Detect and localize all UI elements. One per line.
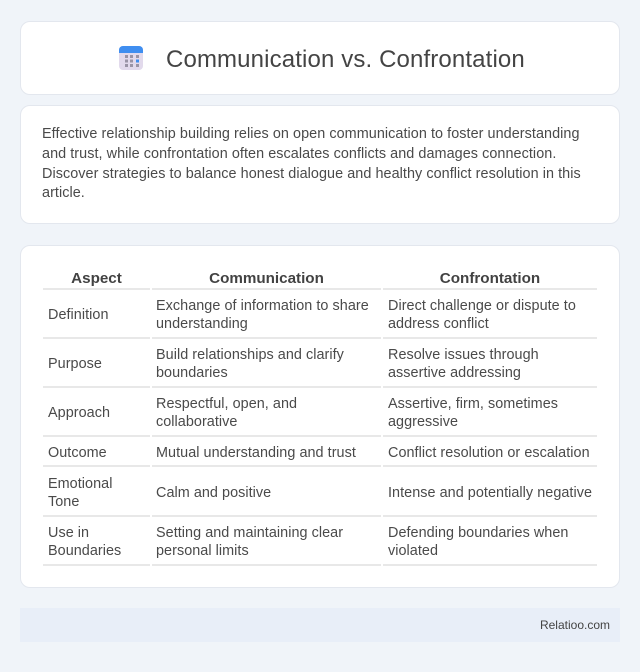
approach confrontation <box>388 396 558 430</box>
panel: comparison table <box>20 245 620 588</box>
purpose communication: boundaries <box>156 365 228 381</box>
purpose confrontation: Resolve issues through <box>388 347 539 363</box>
row: use in boundaries: Boundaries <box>48 543 121 559</box>
row: outcome: Outcome <box>48 445 107 461</box>
row: emotional tone <box>48 476 112 510</box>
definition confrontation: Direct challenge or dispute to <box>388 298 576 314</box>
purpose communication <box>156 347 344 381</box>
boundaries confrontation: Defending boundaries when <box>388 525 568 541</box>
boundaries communication: Setting and maintaining clear <box>156 525 343 541</box>
boundaries communication: personal limits <box>156 543 249 559</box>
approach confrontation: aggressive <box>388 414 458 430</box>
approach communication: Respectful, open, and <box>156 396 297 412</box>
approach communication: collaborative <box>156 414 237 430</box>
boundaries confrontation <box>388 525 568 559</box>
definition communication <box>156 298 369 332</box>
header: aspect: Aspect <box>71 270 122 287</box>
header: confrontation: Confrontation <box>440 270 540 287</box>
emotional tone communication: Calm and positive <box>156 485 271 501</box>
outcome confrontation: Conflict resolution or escalation <box>388 445 590 461</box>
purpose communication: Build relationships and clarify <box>156 347 344 363</box>
intro text <box>42 126 581 201</box>
icon: calendar <box>119 46 143 70</box>
panel: header <box>20 21 620 95</box>
approach confrontation: Assertive, firm, sometimes <box>388 396 558 412</box>
intro text: Effective relationship building relies on open communication to foster understanding <box>42 126 580 142</box>
row: approach: Approach <box>48 405 110 421</box>
header: communication: Communication <box>209 270 324 287</box>
approach communication <box>156 396 297 430</box>
panel: introduction <box>20 105 620 224</box>
definition confrontation: address conflict <box>388 316 489 332</box>
emotional tone confrontation: Intense and potentially negative <box>388 485 592 501</box>
outcome communication: Mutual understanding and trust <box>156 445 356 461</box>
purpose confrontation <box>388 347 539 381</box>
row: emotional tone: Tone <box>48 494 79 510</box>
footer brand: Relatioo.com <box>540 618 610 632</box>
boundaries confrontation: violated <box>388 543 438 559</box>
title: Communication vs. Confrontation <box>166 46 525 73</box>
purpose confrontation: assertive addressing <box>388 365 521 381</box>
intro text: and trust, while confrontation often escalates conflicts and damages connection. <box>42 146 556 162</box>
row: emotional tone: Emotional <box>48 476 112 492</box>
boundaries communication <box>156 525 343 559</box>
intro text: Discover strategies to balance honest dialogue and healthy conflict resolution in this <box>42 166 581 182</box>
row: definition: Definition <box>48 307 108 323</box>
row: use in boundaries <box>48 525 121 559</box>
definition communication: understanding <box>156 316 248 332</box>
row: purpose: Purpose <box>48 356 102 372</box>
footer bar <box>20 608 620 642</box>
definition confrontation <box>388 298 576 332</box>
definition communication: Exchange of information to share <box>156 298 369 314</box>
row: use in boundaries: Use in <box>48 525 89 541</box>
intro text: article. <box>42 185 85 201</box>
